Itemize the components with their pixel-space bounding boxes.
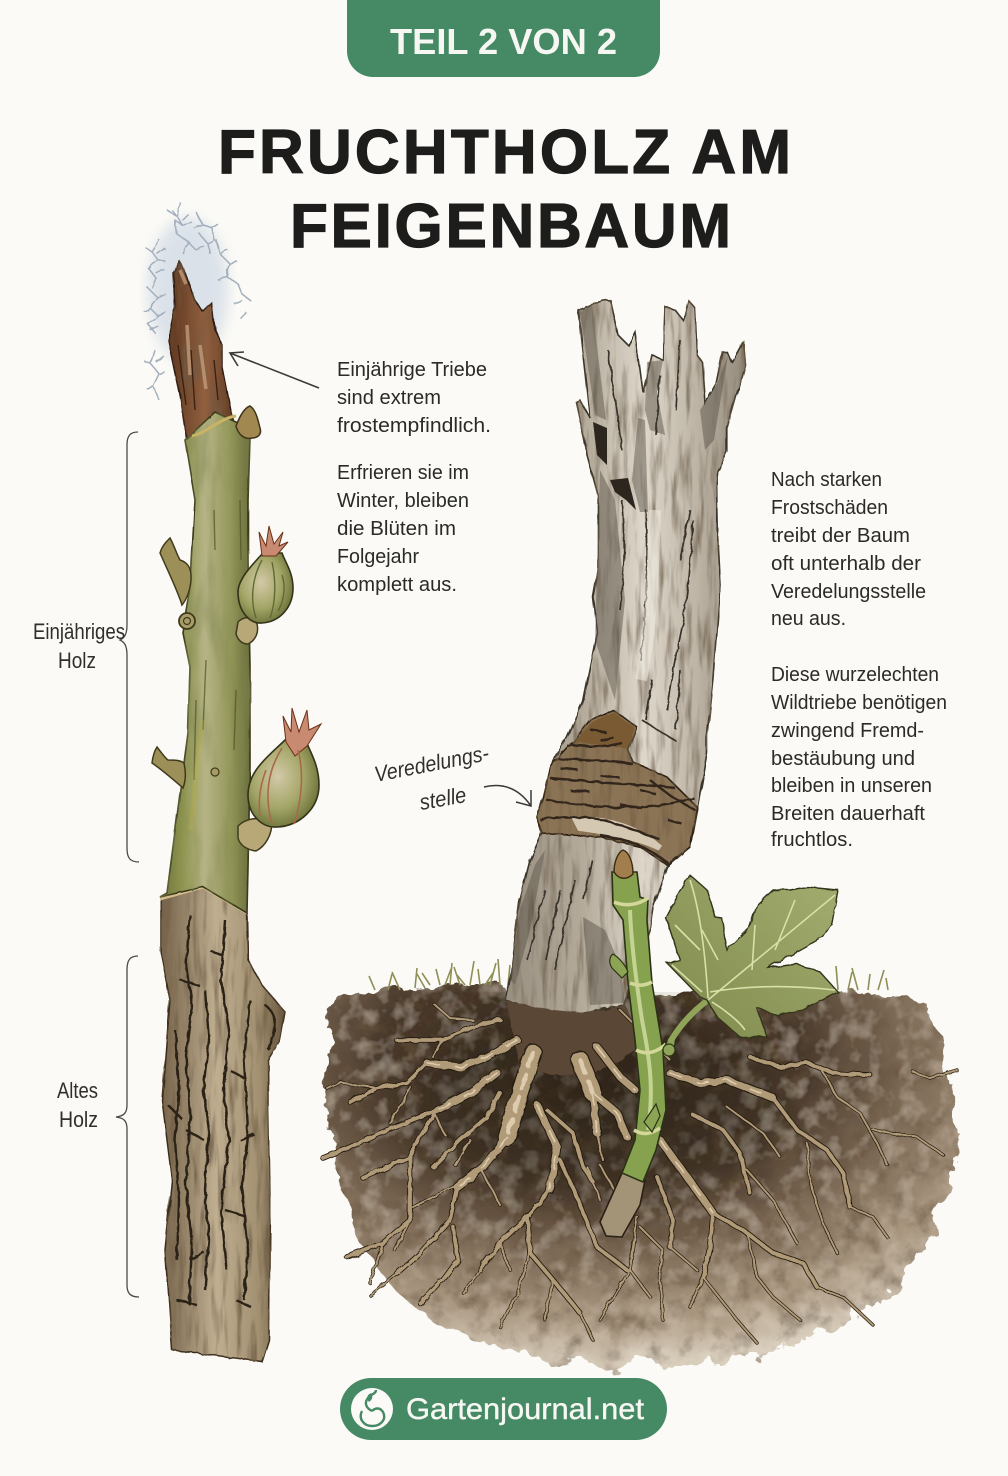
text block: wild shoots: bestäubung und	[771, 748, 915, 770]
text block: frost sensitivity: Erfrieren sie im	[337, 462, 469, 484]
text block: wild shoots: bleiben in unseren	[771, 775, 932, 797]
text block: wild shoots: fruchtlos.	[771, 829, 853, 851]
icon: plant in bowl	[351, 1388, 393, 1430]
illustration: roots	[323, 1000, 957, 1343]
text block: frost sensitivity: Winter, bleiben	[337, 490, 469, 512]
footer logo pill: Gartenjournal.net	[406, 1393, 645, 1426]
title: FEIGENBAUM	[290, 192, 731, 261]
graft union	[537, 710, 697, 865]
text block: frost sensitivity: Einjährige Triebe	[337, 359, 487, 381]
text block: frost damage regrowth	[771, 469, 926, 630]
text block: frost damage regrowth: treibt der Baum	[771, 525, 910, 547]
illustration: soil	[327, 959, 957, 1367]
label: graft point	[372, 740, 491, 815]
text block: frost sensitivity: die Blüten im	[337, 518, 456, 540]
text block: frost damage regrowth: oft unterhalb der	[771, 553, 921, 575]
label: old wood: Holz	[59, 1107, 98, 1132]
label: graft point: stelle	[418, 782, 468, 815]
text block: frost damage regrowth: Nach starken	[771, 469, 882, 491]
text block: frost sensitivity	[337, 359, 491, 596]
dead frost-damaged tip	[168, 262, 235, 442]
footer logo pill	[340, 1378, 667, 1440]
badge: part indicator	[347, 0, 660, 77]
label: old wood: Altes	[57, 1078, 98, 1103]
fig leaf on shoot	[663, 875, 838, 1056]
dark gash	[593, 422, 636, 510]
text block: wild shoots: zwingend Fremd-	[771, 720, 924, 742]
illustration: fruit wood branch	[144, 202, 321, 1362]
text block: wild shoots: Diese wurzelechten	[771, 664, 939, 686]
title	[218, 118, 791, 261]
green one-year wood	[160, 412, 250, 913]
label: one-year wood: Holz	[58, 648, 96, 673]
label: one-year wood: Einjähriges	[33, 619, 125, 644]
text block: wild shoots: Breiten dauerhaft	[771, 803, 925, 825]
text block: wild shoots: Wildtriebe benötigen	[771, 692, 947, 714]
illustration: wild shoot	[600, 850, 675, 1237]
old wood	[160, 885, 285, 1362]
arrow: to frost tip	[230, 352, 319, 388]
title: FRUCHTHOLZ AM	[218, 118, 791, 187]
grass tufts	[369, 959, 888, 990]
badge: part indicator: TEIL 2 VON 2	[390, 21, 617, 62]
text block: wild shoots	[771, 664, 947, 851]
label: one-year wood	[33, 619, 125, 673]
text block: frost damage regrowth: neu aus.	[771, 608, 846, 630]
fig fruit upper	[238, 526, 293, 623]
text block: frost damage regrowth: Veredelungsstelle	[771, 581, 926, 603]
arrow: to graft point	[484, 786, 531, 806]
bark shading	[510, 305, 728, 1005]
frost crystals around tip	[144, 202, 252, 400]
text block: frost damage regrowth: Frostschäden	[771, 497, 888, 519]
label: old wood	[57, 1078, 98, 1132]
label: graft point: Veredelungs-	[372, 740, 491, 787]
bracket: one-year wood	[120, 432, 139, 862]
text block: frost sensitivity: sind extrem	[337, 387, 441, 409]
buds on branch	[152, 406, 272, 851]
bark grain	[527, 340, 693, 970]
illustration: grafted trunk	[505, 300, 745, 1018]
fig fruit lower	[248, 708, 321, 827]
text block: frost sensitivity: komplett aus.	[337, 574, 457, 596]
text block: frost sensitivity: frostempfindlich.	[337, 415, 491, 437]
text block: frost sensitivity: Folgejahr	[337, 546, 419, 568]
bracket: old wood	[116, 956, 139, 1297]
